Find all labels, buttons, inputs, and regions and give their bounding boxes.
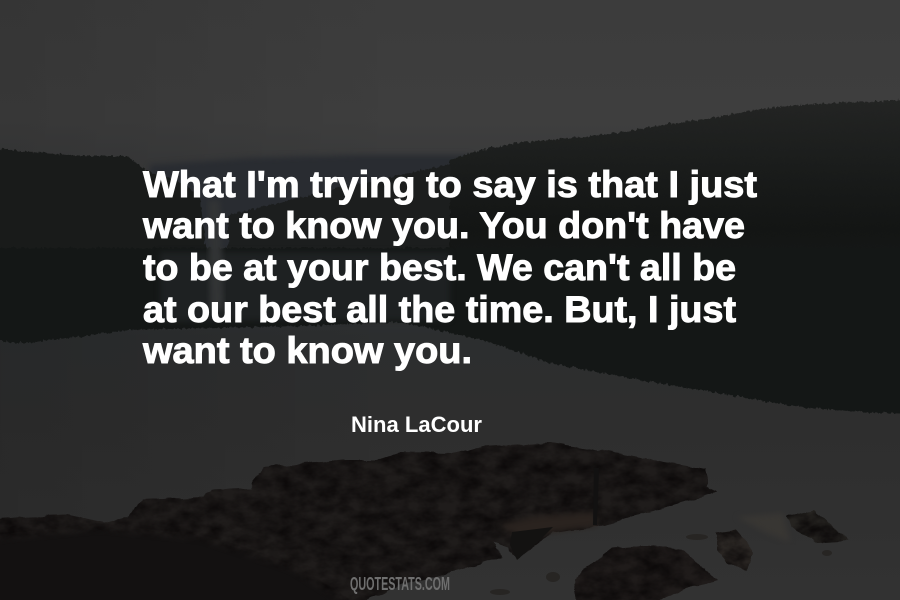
quote text: want to know you.	[142, 329, 472, 371]
quote text	[142, 163, 758, 371]
author name: Nina LaCour	[351, 412, 482, 437]
distant bluish hill	[150, 155, 470, 250]
rock: right stone	[787, 510, 848, 542]
rock: brown band	[500, 512, 597, 538]
quote text: want to know you. You don't have	[142, 204, 745, 246]
quote text: to be at your best. We can't all be	[143, 246, 736, 288]
watermark: QUOTESTATS.COM	[350, 573, 450, 594]
rock: lower right boulder	[573, 545, 717, 600]
centre water reflection of the distant hill	[160, 252, 450, 322]
light gap in the trees and its reflection	[208, 200, 224, 310]
quote text: at our best all the time. But, I just	[143, 288, 737, 330]
rock: dark wedge	[510, 527, 553, 560]
rock: small standing stone	[717, 530, 752, 572]
forest on the far centre shore	[228, 160, 470, 250]
rock: dark crack	[593, 468, 599, 525]
reflection of the forest	[0, 248, 900, 413]
forest on the left shore	[0, 148, 206, 250]
rocks: main outcrop	[0, 443, 718, 600]
quote text: What I'm trying to say is that I just	[143, 163, 758, 205]
rock: faint stone	[737, 513, 790, 542]
forest hill on the right	[450, 100, 900, 252]
rock: small pebbles	[490, 534, 832, 595]
rock: shadow mass lower left	[0, 530, 345, 600]
